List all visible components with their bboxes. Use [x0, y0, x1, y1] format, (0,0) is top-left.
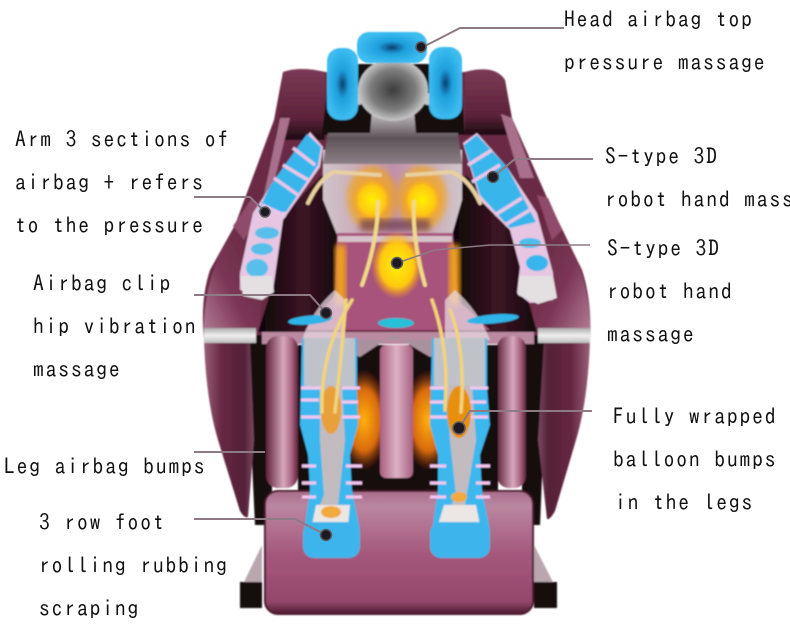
seat bar: [262, 332, 534, 344]
dark vertical gaps next to side panels: [246, 335, 272, 525]
upper side panels: [262, 118, 290, 205]
waist: [305, 233, 490, 330]
lower right side panel: [538, 340, 590, 519]
central leg pillar: [380, 345, 413, 478]
label: hip vibration: [33, 272, 197, 380]
right shell highlight: [525, 205, 590, 340]
label: fully wrapped legs: balloon bumps: [613, 448, 777, 470]
label: foot rolling: rolling rubbing: [39, 554, 229, 576]
base feet: [240, 582, 262, 608]
foot airbags: [303, 522, 360, 558]
right body cavity: [452, 175, 537, 332]
label: arm airbag: airbag + refers: [15, 171, 205, 193]
thigh tubes: [322, 300, 462, 412]
leader lines: [194, 28, 593, 535]
shoulder to chest tubes: [308, 172, 480, 285]
marker dots: [260, 42, 498, 540]
label: S-type robot hand upper: S-type 3D: [605, 145, 719, 167]
belly heat zone: [371, 231, 423, 299]
label: foot rolling: 3 row foot: [39, 511, 166, 533]
right arm: [463, 133, 553, 303]
seat inverted V: [300, 335, 490, 357]
label: S-type robot hand lower: S-type 3D: [607, 237, 721, 259]
torso chest: [323, 150, 462, 235]
mid side panels: [233, 198, 262, 240]
left and right leg cushions: [266, 336, 298, 488]
head silhouette: [352, 59, 434, 121]
label: foot rolling: [39, 511, 229, 619]
right leg: [430, 338, 490, 530]
label: foot rolling: scraping: [39, 597, 140, 619]
shoulders and neck: [323, 112, 462, 164]
label: arm airbag: Arm 3 sections of: [15, 128, 230, 150]
label: fully wrapped legs: Fully wrapped: [613, 405, 777, 427]
label: hip vibration: Airbag clip: [33, 272, 172, 294]
hip pale curves: [302, 290, 345, 340]
label: fully wrapped legs: in the legs: [615, 491, 754, 513]
label: S-type robot hand lower: [607, 237, 734, 345]
silver bands: [204, 328, 256, 343]
waist light band: [338, 236, 452, 242]
massage chair illustration: [203, 32, 590, 614]
hip air pads: [288, 314, 332, 326]
chest dark band: [360, 219, 430, 231]
lower left side panel: [204, 340, 254, 517]
torso orange sides: [335, 245, 346, 305]
label: leg airbag: Leg airbag bumps: [4, 455, 206, 477]
label: head airbag: Head airbag top: [564, 8, 754, 30]
label: head airbag: pressure massage: [564, 51, 766, 73]
chair shell: [203, 69, 590, 340]
label: hip vibration: massage: [33, 358, 122, 380]
footrest: [265, 491, 533, 614]
left body cavity: [258, 175, 340, 332]
backrest wings: [275, 69, 325, 140]
label: head airbag: [564, 8, 766, 73]
label: arm airbag: to the pressure: [15, 214, 205, 236]
leg glows: [338, 368, 390, 472]
label: S-type robot hand upper: [605, 145, 790, 210]
label: arm airbag: [15, 128, 230, 236]
knee heat: [447, 386, 471, 438]
left arm: [240, 132, 323, 294]
hands: [240, 276, 274, 300]
left leg: [300, 338, 362, 530]
label: S-type robot hand lower: robot hand: [607, 280, 734, 302]
label: S-type robot hand lower: massage: [607, 323, 696, 345]
label: hip vibration: hip vibration: [33, 315, 197, 337]
central dark leg area: [298, 345, 498, 492]
left shell highlight: [204, 212, 268, 340]
chest heat zones: [347, 166, 397, 230]
ankles: [312, 505, 350, 525]
head airbags: [327, 32, 462, 120]
headrest black backing: [322, 64, 465, 135]
label: fully wrapped legs: [613, 405, 777, 513]
